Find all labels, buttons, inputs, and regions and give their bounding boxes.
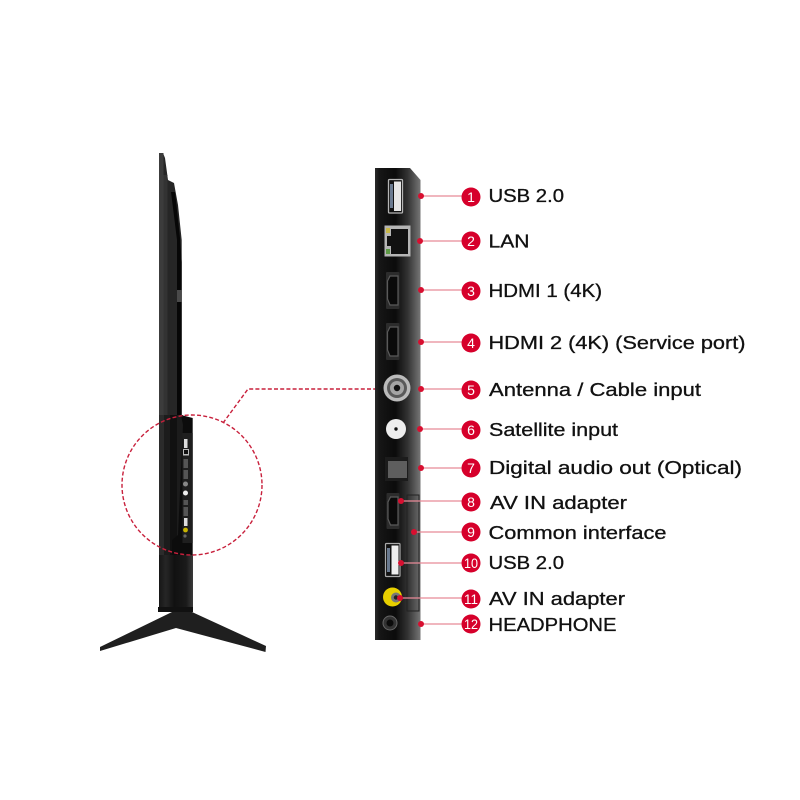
optical port bbox=[385, 457, 408, 481]
callout 8: 8 bbox=[467, 494, 475, 510]
callout 3 bbox=[418, 280, 602, 301]
callout 9: 9 bbox=[467, 524, 475, 540]
callout 7: Digital audio out (Optical) bbox=[489, 457, 742, 478]
callout 4: HDMI 2 (4K) (Service port) bbox=[488, 332, 746, 353]
callout 6: 6 bbox=[467, 422, 475, 438]
callout 6: Satellite input bbox=[489, 419, 618, 440]
port panel bbox=[375, 168, 420, 640]
TV side view bbox=[100, 153, 266, 652]
callout 4: 4 bbox=[467, 335, 475, 351]
USB port top bbox=[388, 180, 402, 213]
HDMI 2 bbox=[386, 323, 400, 360]
callout 8 bbox=[398, 492, 627, 513]
TV body bbox=[159, 153, 182, 415]
callout 11 bbox=[397, 588, 625, 609]
stand bbox=[100, 612, 266, 652]
dashed zoom circle and connector bbox=[122, 389, 375, 555]
HDMI 3 bbox=[386, 493, 400, 529]
miniature ports bbox=[183, 439, 189, 538]
callout 2: LAN bbox=[488, 230, 530, 252]
callout 7 bbox=[418, 457, 742, 478]
callout 3: 3 bbox=[467, 283, 475, 299]
callout 11: 11 bbox=[464, 591, 478, 607]
callout 9 bbox=[411, 522, 666, 543]
callout 12: HEADPHONE bbox=[488, 614, 616, 635]
callout 10 bbox=[398, 552, 564, 573]
satellite jack bbox=[386, 419, 406, 439]
AV jack bbox=[383, 588, 402, 606]
LAN port bbox=[384, 226, 410, 256]
callout 11: AV IN adapter bbox=[489, 588, 625, 609]
HDMI 1 bbox=[386, 272, 400, 309]
callout 1: USB 2.0 bbox=[488, 185, 564, 206]
callout 5 bbox=[418, 379, 701, 400]
callout 2: 2 bbox=[467, 233, 475, 249]
common interface slot bbox=[407, 495, 419, 611]
callout 10: 10 bbox=[464, 555, 478, 571]
headphone jack bbox=[383, 616, 397, 630]
callout 5: Antenna / Cable input bbox=[489, 379, 701, 400]
callout 10: USB 2.0 bbox=[488, 552, 564, 573]
callout 7: 7 bbox=[467, 460, 475, 476]
panel background bbox=[375, 168, 420, 640]
TV base column bbox=[159, 555, 193, 608]
rear port box bbox=[172, 415, 193, 555]
callout 8: AV IN adapter bbox=[490, 492, 627, 513]
callout 5: 5 bbox=[467, 382, 475, 398]
callout 6 bbox=[417, 419, 618, 440]
USB port lower bbox=[386, 544, 400, 576]
antenna jack bbox=[384, 374, 410, 402]
callout 2 bbox=[417, 230, 530, 252]
callout 1: 1 bbox=[467, 189, 475, 205]
callout 12: 12 bbox=[464, 616, 478, 632]
callout 3: HDMI 1 (4K) bbox=[488, 280, 602, 301]
callout 1 bbox=[418, 185, 564, 206]
callout 4 bbox=[418, 332, 746, 353]
callout 12 bbox=[418, 614, 616, 635]
callout 9: Common interface bbox=[488, 522, 666, 543]
